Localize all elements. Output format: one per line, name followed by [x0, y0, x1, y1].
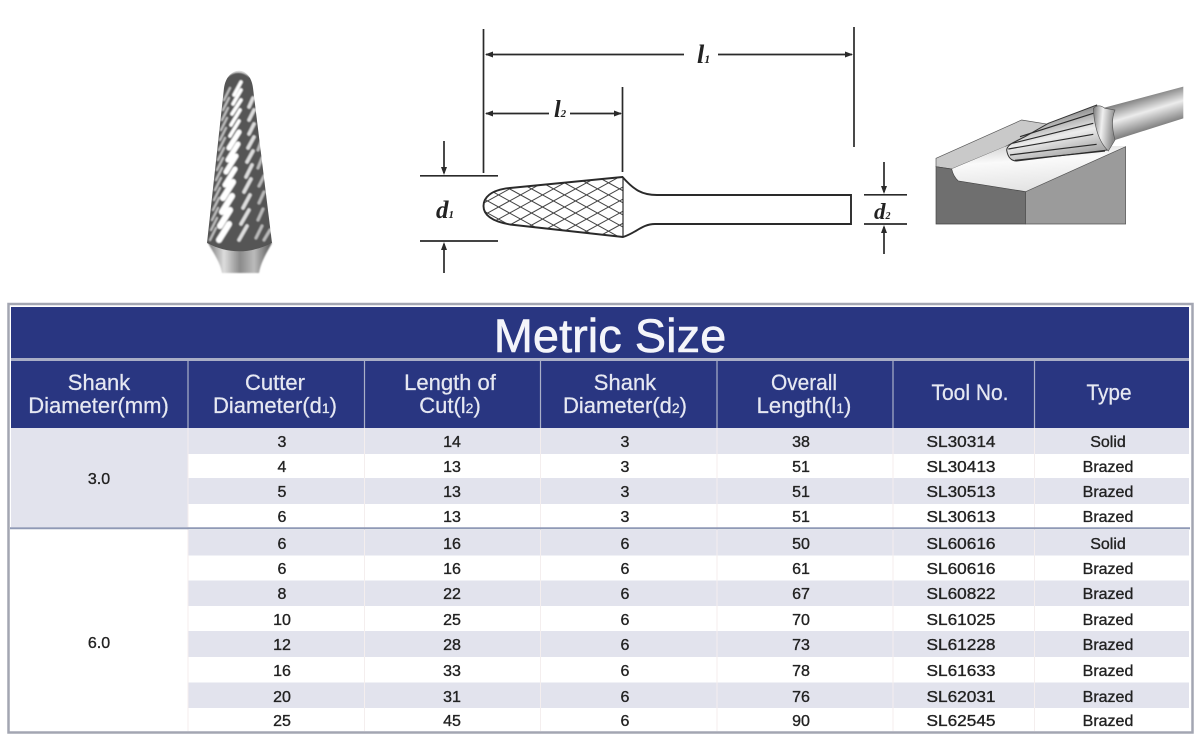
row SL61633: SL61633	[926, 663, 996, 680]
row SL30413: 4	[278, 459, 287, 476]
row SL30613: Brazed	[1083, 509, 1133, 526]
row SL30413: 3	[621, 459, 630, 476]
row SL61228	[273, 637, 1133, 654]
row stripes	[11, 428, 1189, 708]
dimension: d2 shank diameter	[864, 162, 907, 254]
row SL61633: 16	[273, 663, 291, 680]
row SL62545: 25	[273, 713, 291, 730]
row SL30513: 13	[443, 484, 461, 501]
row SL30413: 13	[443, 459, 461, 476]
table header row: Tool No.	[932, 380, 1008, 405]
row SL62031: SL62031	[926, 689, 996, 706]
table title: Metric Size	[494, 309, 726, 362]
row SL62031	[273, 689, 1133, 706]
dimension: l2 length of cut	[485, 87, 622, 172]
group: shank 6.0	[88, 536, 1133, 730]
row SL30413: 51	[792, 459, 810, 476]
row SL61228: 73	[792, 637, 810, 654]
table header row: Overall	[771, 370, 837, 395]
row SL61633: Brazed	[1083, 663, 1133, 680]
row SL30613: 6	[278, 509, 287, 526]
dimension: d1 cutter diameter: d1	[436, 197, 454, 224]
group: shank 3.0: 3.0	[88, 471, 110, 488]
row SL60616 brazed: 61	[792, 561, 810, 578]
row SL60616 brazed: 16	[443, 561, 461, 578]
row SL30314: SL30314	[926, 434, 996, 451]
row SL61228: 28	[443, 637, 461, 654]
row SL62545: 6	[621, 713, 630, 730]
row SL30513: SL30513	[926, 484, 996, 501]
photo: carbide burr	[207, 70, 272, 274]
row SL61228: Brazed	[1083, 637, 1133, 654]
row SL61025: SL61025	[926, 612, 996, 629]
row SL60616 solid	[278, 536, 1126, 553]
row SL62031: 31	[443, 689, 461, 706]
dimension: l1 overall length	[484, 27, 854, 173]
row SL61633: 78	[792, 663, 810, 680]
row SL60616 brazed	[278, 561, 1133, 578]
row SL30413: Brazed	[1083, 459, 1133, 476]
row SL60616 brazed: SL60616	[926, 561, 996, 578]
row SL30513: 3	[621, 484, 630, 501]
dimension: d2 shank diameter: d2	[874, 199, 890, 224]
row SL30413	[278, 459, 1133, 476]
row SL61025: 25	[443, 612, 461, 629]
row SL30513	[278, 484, 1133, 501]
table header row: Cut(l2)	[419, 393, 481, 418]
row SL30314: 3	[621, 434, 630, 451]
dimension: l1 overall length: l1	[697, 40, 710, 69]
row SL61025	[273, 612, 1133, 629]
row SL30513: Brazed	[1083, 484, 1133, 501]
row SL30413: SL30413	[926, 459, 996, 476]
row SL30314: 38	[792, 434, 810, 451]
row SL60616 brazed: 6	[621, 561, 630, 578]
burr shoulder	[1093, 106, 1115, 151]
row SL30613: 13	[443, 509, 461, 526]
row SL60822: 67	[792, 586, 810, 603]
row SL30613: 51	[792, 509, 810, 526]
row SL30314: 14	[443, 434, 461, 451]
row SL30513: 5	[278, 484, 287, 501]
row SL61633: 33	[443, 663, 461, 680]
row SL60616 solid: SL60616	[926, 536, 996, 553]
row SL60616 solid: Solid	[1090, 536, 1126, 553]
table header row: Shank	[594, 370, 657, 395]
burr shank	[1102, 87, 1183, 140]
dimension: l2 length of cut: l2	[554, 97, 567, 123]
row SL61025: 6	[621, 612, 630, 629]
row SL30613	[278, 509, 1133, 526]
table header row	[11, 361, 1189, 428]
table header row: Type	[1086, 380, 1132, 405]
table: metric size	[8, 304, 1192, 732]
row SL60822	[278, 586, 1133, 603]
row SL61228: 6	[621, 637, 630, 654]
row SL60822: SL60822	[926, 586, 996, 603]
cutter hatch	[484, 178, 622, 236]
table header row: Length(l1)	[757, 393, 851, 418]
table header row: Cutter	[245, 370, 305, 395]
row SL61633: 6	[621, 663, 630, 680]
row SL60822: 6	[621, 586, 630, 603]
row SL60616 solid: 6	[621, 536, 630, 553]
burr cutter	[1007, 105, 1108, 161]
row SL62031: 20	[273, 689, 291, 706]
row SL61633	[273, 663, 1133, 680]
table header row: Length of	[404, 370, 497, 395]
row SL60616 brazed: Brazed	[1083, 561, 1133, 578]
row SL30314: Solid	[1090, 434, 1126, 451]
row SL61228: SL61228	[926, 637, 996, 654]
row SL60616 solid: 16	[443, 536, 461, 553]
row SL61025: 10	[273, 612, 291, 629]
row SL60822: 22	[443, 586, 461, 603]
technical drawing: burr dimensions	[400, 27, 907, 273]
row SL62031: 6	[621, 689, 630, 706]
table header row: Shank	[68, 370, 131, 395]
group: shank 3.0	[88, 434, 1133, 526]
row SL30314: 3	[278, 434, 287, 451]
row SL60616 solid: 6	[278, 536, 287, 553]
group: shank 6.0: 6.0	[88, 635, 110, 652]
row SL62545: 90	[792, 713, 810, 730]
row SL62545	[273, 713, 1133, 730]
illustration: burr cutting a workpiece	[936, 87, 1183, 224]
row SL61025: 70	[792, 612, 810, 629]
dimension: d1 cutter diameter	[420, 141, 498, 273]
row SL62545: 45	[443, 713, 461, 730]
row SL60822: Brazed	[1083, 586, 1133, 603]
row SL30314	[278, 434, 1126, 451]
row SL60616 solid: 50	[792, 536, 810, 553]
row SL30613: 3	[621, 509, 630, 526]
table header row: Diameter(mm)	[28, 393, 169, 418]
row SL62031: Brazed	[1083, 689, 1133, 706]
table header row: Diameter(d2)	[563, 393, 687, 418]
row SL30513: 51	[792, 484, 810, 501]
row SL62031: 76	[792, 689, 810, 706]
row SL60616 brazed: 6	[278, 561, 287, 578]
row SL61228: 12	[273, 637, 291, 654]
table header row: Diameter(d1)	[213, 393, 337, 418]
row SL61025: Brazed	[1083, 612, 1133, 629]
row SL62545: Brazed	[1083, 713, 1133, 730]
row SL60822: 8	[278, 586, 287, 603]
row SL62545: SL62545	[926, 713, 996, 730]
burr outline	[484, 177, 851, 237]
table title	[11, 307, 1189, 362]
row SL30613: SL30613	[926, 509, 996, 526]
